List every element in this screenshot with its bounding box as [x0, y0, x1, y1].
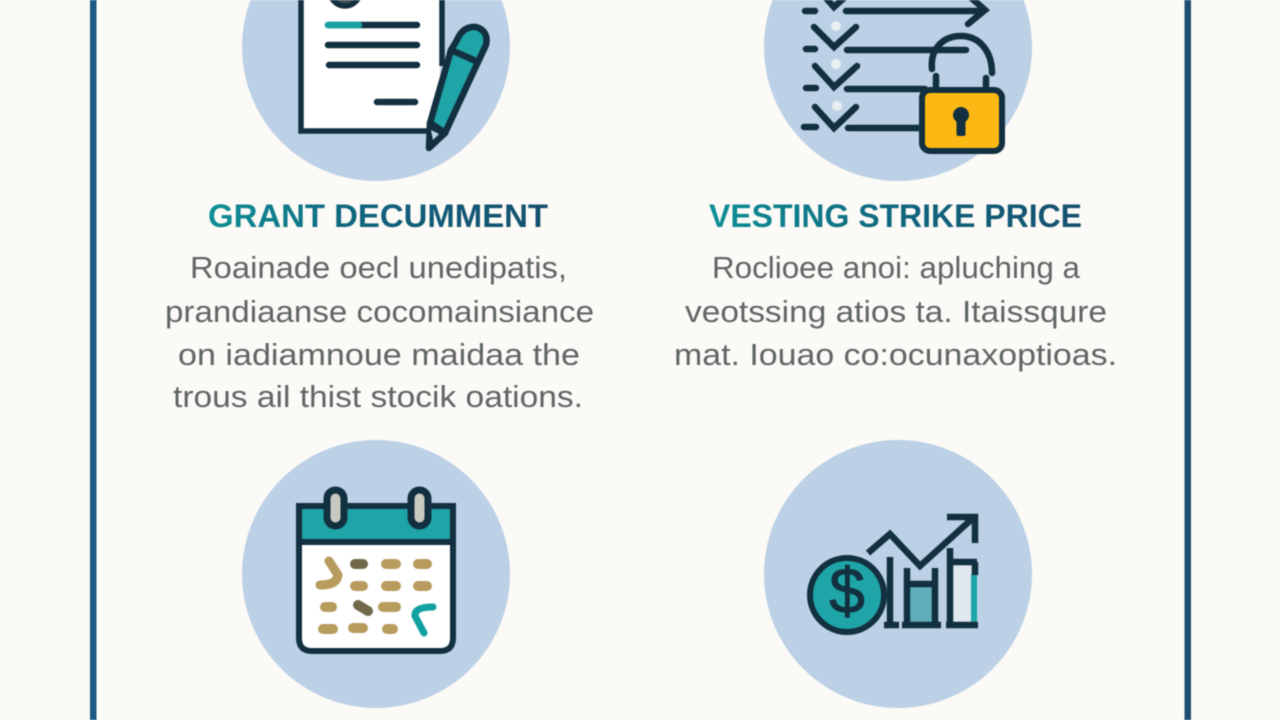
icon: calendar	[299, 490, 453, 651]
panel: vesting and strike price	[674, 0, 1117, 372]
text block: vesting description	[674, 250, 1117, 372]
icon: dollar coin and rising chart	[810, 517, 978, 632]
text block: grant document description: on iadiamnoue maidaa the	[178, 337, 580, 372]
text block: grant document description: Roainade oecl unedipatis,	[190, 250, 567, 285]
icon: dollar sign: $	[829, 555, 865, 627]
text block: grant document description: prandiaanse cocomainsiance	[165, 294, 594, 329]
icon: vesting checklist and padlock	[764, 0, 1032, 181]
panel: stock value growth	[764, 440, 1032, 708]
text block: grant document description	[165, 250, 594, 414]
text block: vesting description: mat. Iouao co:ocunaxoptioas.	[674, 337, 1117, 372]
icon: document and pen	[242, 0, 510, 181]
heading: grant document: GRANT DECUMMENT	[208, 198, 548, 234]
panel: calendar	[242, 440, 510, 708]
panel: grant document	[165, 0, 594, 414]
text block: vesting description: Roclioee anoi: apluching a	[712, 250, 1081, 285]
text block: grant document description: trous ail thist stocik oations.	[173, 379, 583, 414]
text block: vesting description: veotssing atios ta. Itaissqure	[685, 294, 1107, 329]
heading: vesting strike price: VESTING STRIKE PRICE	[709, 198, 1082, 234]
